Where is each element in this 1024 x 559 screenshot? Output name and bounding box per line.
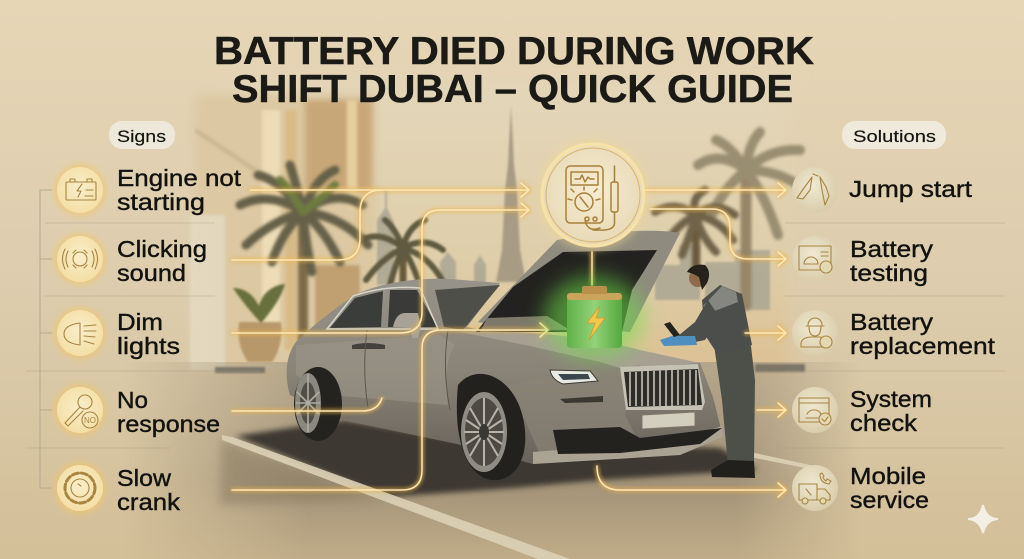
plate [642,412,695,429]
car hood open [476,231,680,332]
sign: Slow crank: crank [117,489,181,515]
palm left [240,165,368,345]
distant city [377,190,770,310]
sign: Slow crank: Slow [117,465,171,491]
title [214,30,814,111]
sign: Slow crank [54,462,181,515]
solution: Battery testing: testing [850,260,928,286]
solution: Battery replacement: Battery [850,309,934,335]
sign: Clicking sound: Clicking [117,236,207,262]
car hood surface [460,331,700,368]
connector lines [232,183,786,497]
mechanic arm [678,300,720,345]
pill: Signs [109,121,175,149]
side windows [330,291,383,328]
solution: Mobile service: Mobile [850,463,926,489]
lower intake [553,427,722,454]
door handle [352,343,385,349]
pill: Solutions [842,121,946,149]
solution: Battery testing: Battery [850,236,934,262]
sign: Engine not starting: starting [117,189,205,215]
icon: glowing battery [544,276,644,360]
sign: Engine not starting [54,164,242,216]
palm right small [655,190,735,270]
palm right [698,132,805,305]
solution: Battery testing [792,236,934,286]
solution: Jump start [792,167,973,213]
mechanic head [689,269,707,287]
mechanic [660,265,755,478]
solution: System check [792,386,932,436]
title: BATTERY DIED DURING WORK [214,30,814,73]
icon: sparkle [968,505,998,533]
sign: No response: No [117,387,148,413]
sign: Clicking sound [54,233,207,286]
road stripe [222,435,815,559]
panel: signs [54,164,242,515]
car [287,231,755,480]
grille [620,364,705,410]
pill: Signs: Signs [117,127,166,146]
windshield [435,285,500,330]
tower [496,105,526,282]
headlight [550,370,598,384]
building left [190,95,375,370]
icon: multimeter hub [539,141,647,249]
pill: Solutions: Solutions [853,127,936,146]
sign: Dim lights: lights [117,333,180,359]
road [152,362,841,559]
solution: Jump start: Jump start [849,176,973,202]
sign: No response: response [117,411,220,437]
mechanic boots [711,460,755,478]
car body [287,279,723,464]
car front bumper [533,426,723,464]
curb strips [215,364,805,373]
sign: Clicking sound: sound [117,260,186,286]
door seam [365,330,450,410]
sign: No response [54,384,220,437]
potted plant [233,284,285,362]
sign: Engine not starting: Engine not [117,165,242,191]
solution: Battery replacement: replacement [850,333,996,359]
palm mid [362,220,443,292]
left bracket [40,190,52,488]
car shadow on road [220,420,758,505]
mechanic torso [702,285,752,355]
rear wheel [294,367,342,441]
solution: Mobile service [792,463,929,513]
car side highlight [296,335,455,405]
solution: System check: check [850,410,918,436]
sign: Dim lights [54,307,180,359]
solution: System check: System [850,386,932,412]
background: Dubai skyline and palms [190,95,805,370]
gloves and phone [660,336,697,346]
solution: Battery replacement [792,309,996,359]
title: SHIFT DUBAI – QUICK GUIDE [232,68,793,111]
solution: Mobile service: service [850,487,929,513]
sign: No response: NO [84,416,96,425]
mechanic legs [714,338,755,466]
front wheel [457,374,525,480]
panel: solutions [792,167,996,513]
mirror [393,313,421,338]
sign: Dim lights: Dim [117,309,163,335]
